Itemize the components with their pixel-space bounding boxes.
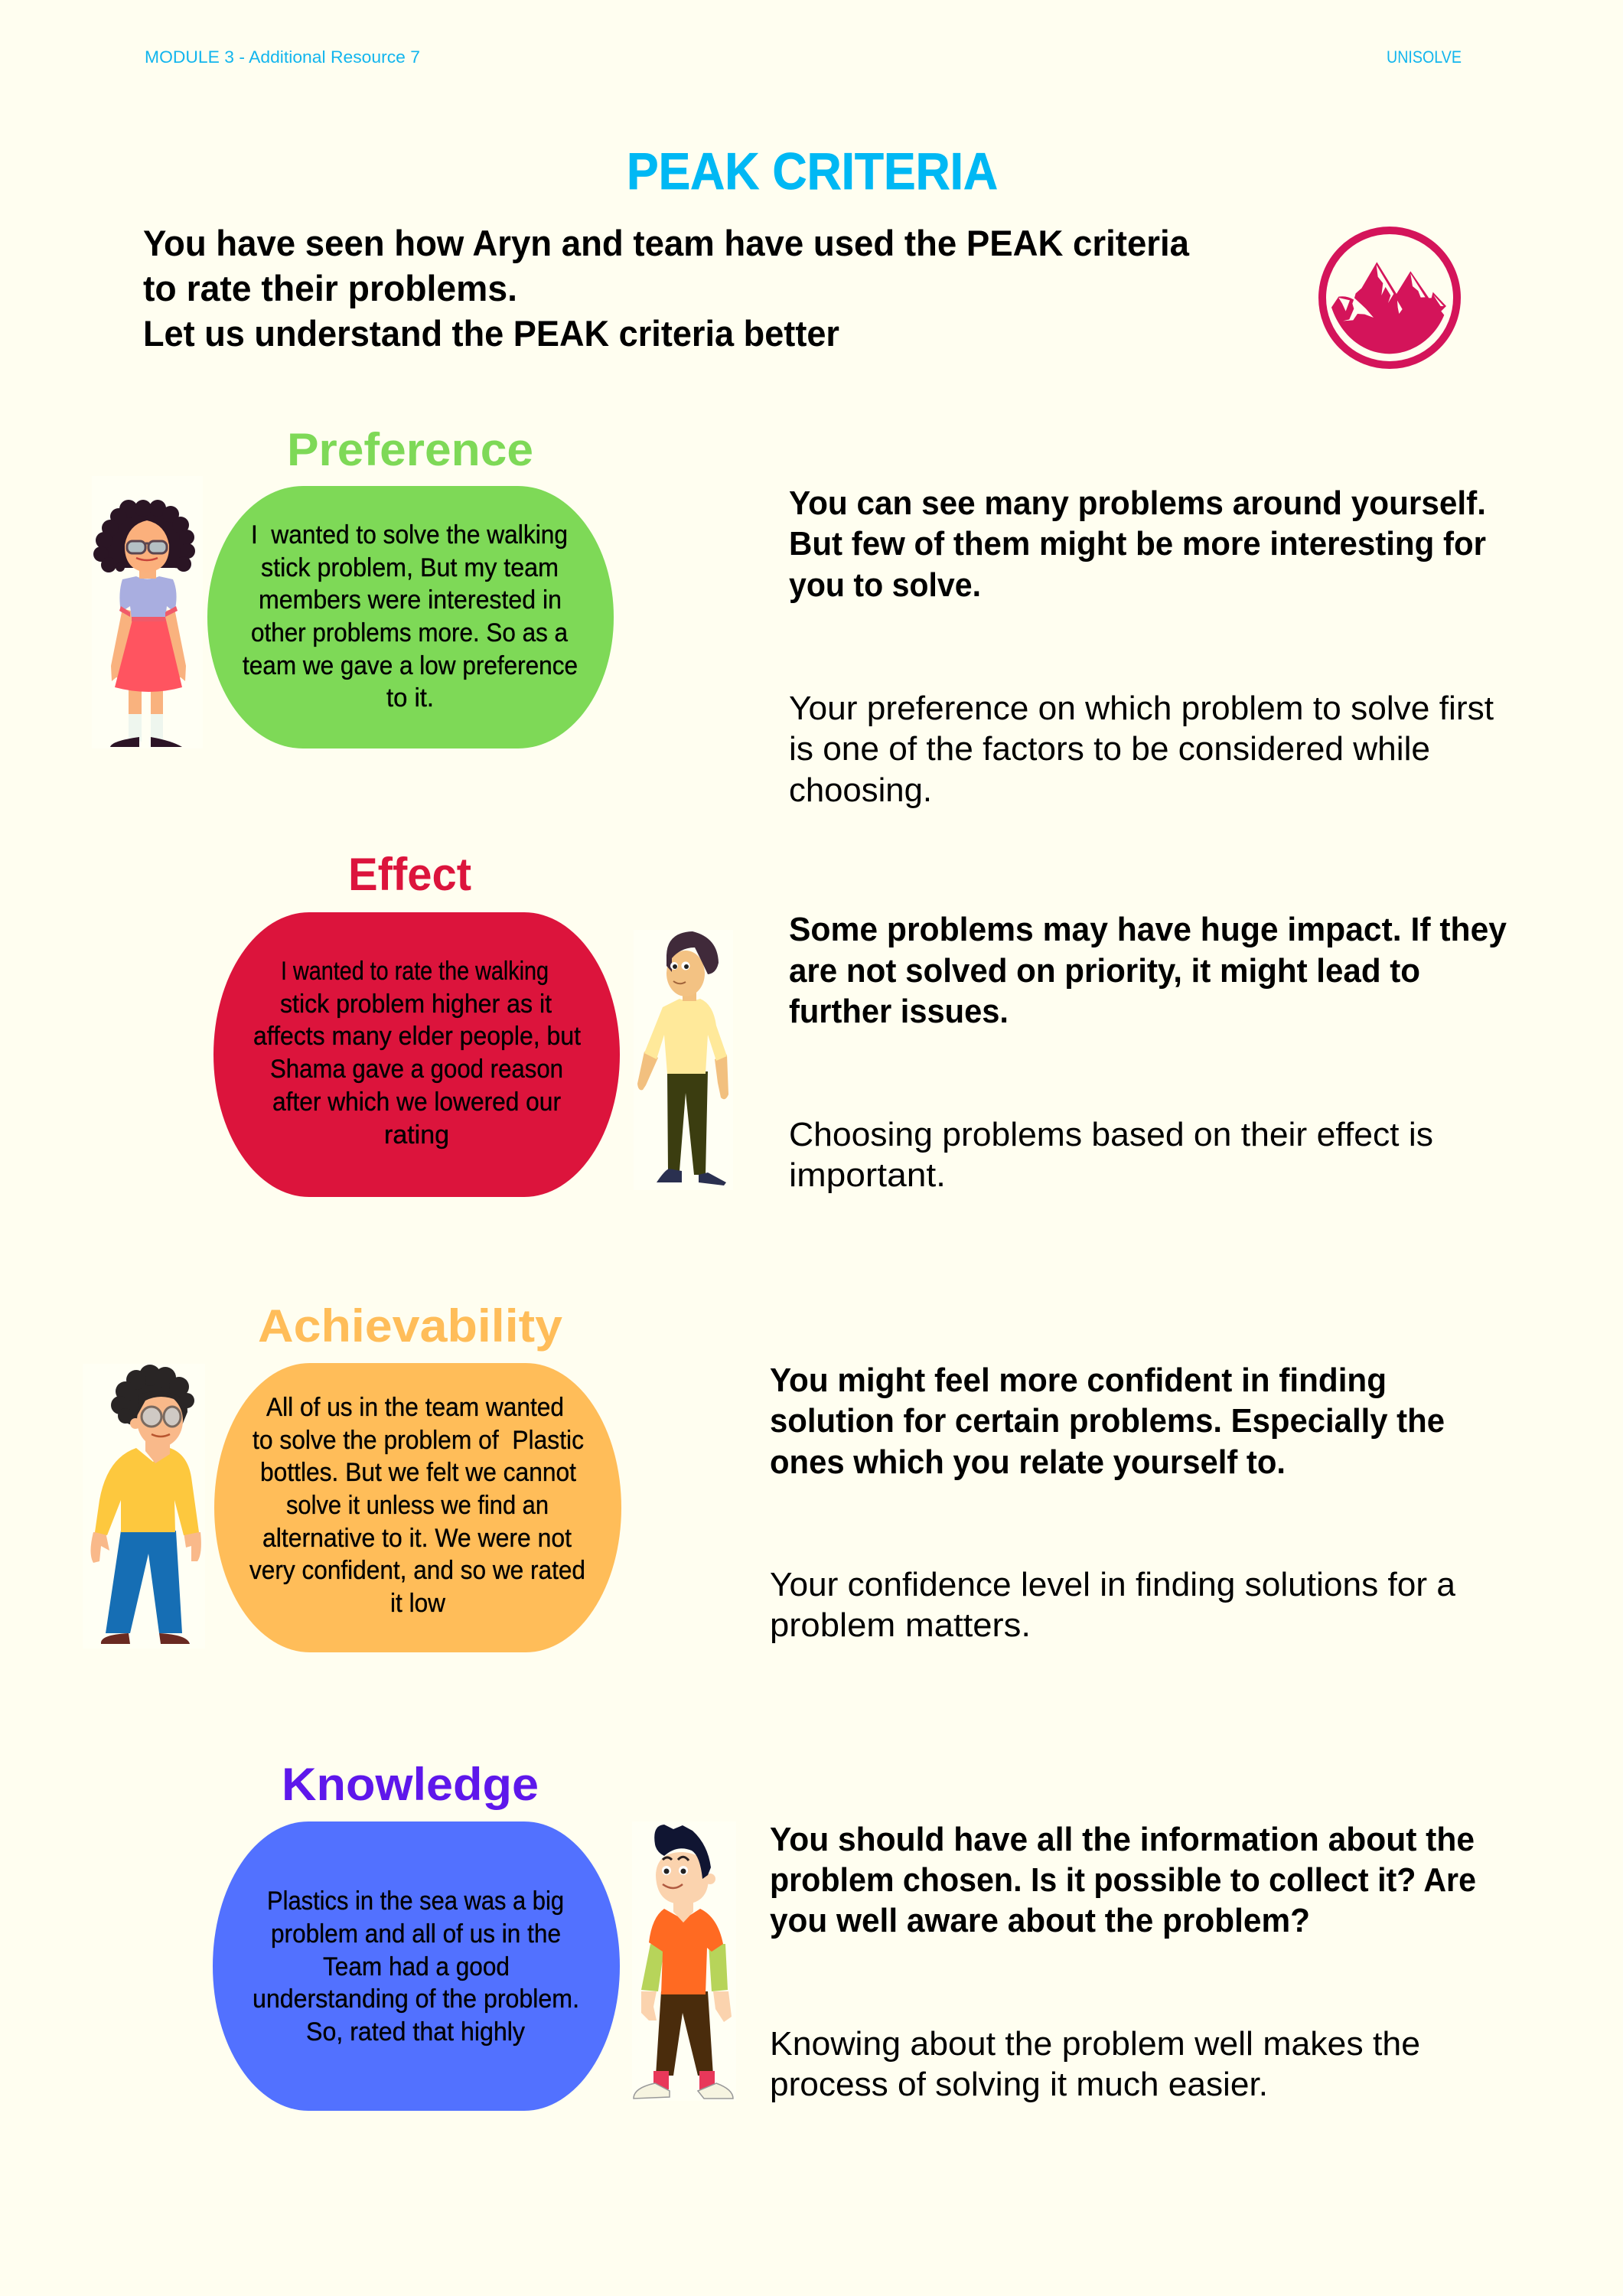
explanation: preference: you to solve. [789,566,981,604]
speech bubble: knowledge: So, rated that highly [306,2017,525,2047]
explanation: preference: Your preference on which problem to solve first [789,690,1494,727]
speech bubble: preference: team we gave a low preference [243,651,578,680]
explanation: preference: But few of them might be more interesting for [789,525,1486,563]
speech bubble: achievability: to solve the problem of Plastic [253,1426,584,1455]
header: module label: MODULE 3 - Additional Resource 7 [145,47,420,67]
explanation: knowledge: Knowing about the problem well makes the [770,2025,1420,2063]
speech bubble: achievability: All of us in the team wanted [266,1393,564,1422]
explanation: achievability: Your confidence level in finding solutions for a [770,1566,1456,1603]
speech bubble: achievability: bottles. But we felt we cannot [260,1458,577,1487]
explanation: knowledge: problem chosen. Is it possible to collect it? Are [770,1861,1476,1899]
speech bubble: achievability: very confident, and so we rated [249,1556,585,1585]
explanation: knowledge: you well aware about the problem? [770,1902,1310,1939]
speech bubble: knowledge [213,1821,620,2111]
speech bubble: preference: other problems more. So as a [251,618,568,647]
speech bubble: achievability [214,1363,621,1652]
explanation: knowledge: process of solving it much easier. [770,2066,1268,2103]
speech bubble: achievability: alternative to it. We were not [262,1524,572,1553]
heading: Knowledge: Knowledge [282,1759,539,1810]
speech bubble: knowledge: problem and all of us in the [271,1919,561,1949]
speech bubble: effect: Shama gave a good reason [270,1055,563,1084]
explanation: effect: are not solved on priority, it might lead to [789,952,1420,990]
explanation: effect: important. [789,1156,946,1194]
explanation: effect [789,911,1507,1194]
speech bubble: knowledge: understanding of the problem. [253,1985,579,2014]
explanation: achievability: You might feel more confident in finding [770,1362,1387,1399]
title: PEAK CRITERIA [627,142,998,201]
panel: knowledge [213,1759,1476,2111]
heading: Achievability: Achievability [258,1300,563,1352]
speech bubble: preference [207,486,614,748]
speech bubble: achievability: it low [390,1589,445,1618]
explanation: effect: Choosing problems based on their effect is [789,1116,1433,1153]
header: Unisolve label: UNISOLVE [1387,47,1462,67]
explanation: effect: further issues. [789,993,1009,1030]
speech bubble: preference: to it. [386,683,434,713]
intro text block: You have seen how Aryn and team have used the PEAK criteria [143,223,1190,263]
heading: Effect: Effect [348,849,471,900]
explanation: achievability [770,1362,1456,1644]
icon: mountain logo [1322,230,1457,365]
speech bubble: effect: stick problem higher as it [280,990,552,1019]
explanation: preference [789,484,1494,809]
speech bubble: knowledge: Team had a good [323,1952,510,1981]
intro text block: Let us understand the PEAK criteria better [143,313,839,354]
speech bubble: effect: I wanted to rate the walking [281,957,549,986]
explanation: achievability: solution for certain problems. Especially the [770,1402,1445,1440]
explanation: achievability: ones which you relate yourself to. [770,1443,1286,1481]
character: girl with curly hair [92,476,203,748]
speech bubble: effect: affects many elder people, but [253,1022,582,1051]
character: boy in yellow shirt with glasses [83,1364,205,1649]
explanation: effect: Some problems may have huge impact. If they [789,911,1507,948]
character: boy in orange shirt [632,1821,736,2101]
panel: achievability [83,1300,1456,1652]
intro text block [143,223,1190,354]
speech bubble: effect [213,912,620,1197]
speech bubble: effect: rating [384,1120,449,1150]
speech bubble: achievability: solve it unless we find an [286,1491,549,1520]
character: boy in cream sweater [634,930,733,1190]
explanation: knowledge: You should have all the information about the [770,1821,1475,1858]
speech bubble: effect: after which we lowered our [272,1088,561,1117]
speech bubble: preference: I wanted to solve the walking [251,520,568,550]
intro text block: to rate their problems. [143,268,517,308]
heading: Preference: Preference [287,424,533,475]
explanation: preference: You can see many problems around yourself. [789,484,1486,522]
panel: effect [213,849,1507,1197]
explanation: achievability: problem matters. [770,1606,1031,1644]
panel: preference [92,424,1494,809]
speech bubble: knowledge: Plastics in the sea was a big [267,1887,564,1916]
speech bubble: preference: members were interested in [259,585,562,615]
explanation: knowledge [770,1821,1476,2103]
speech bubble: preference: stick problem, But my team [261,553,559,582]
explanation: preference: is one of the factors to be considered while [789,730,1430,768]
explanation: preference: choosing. [789,771,932,809]
